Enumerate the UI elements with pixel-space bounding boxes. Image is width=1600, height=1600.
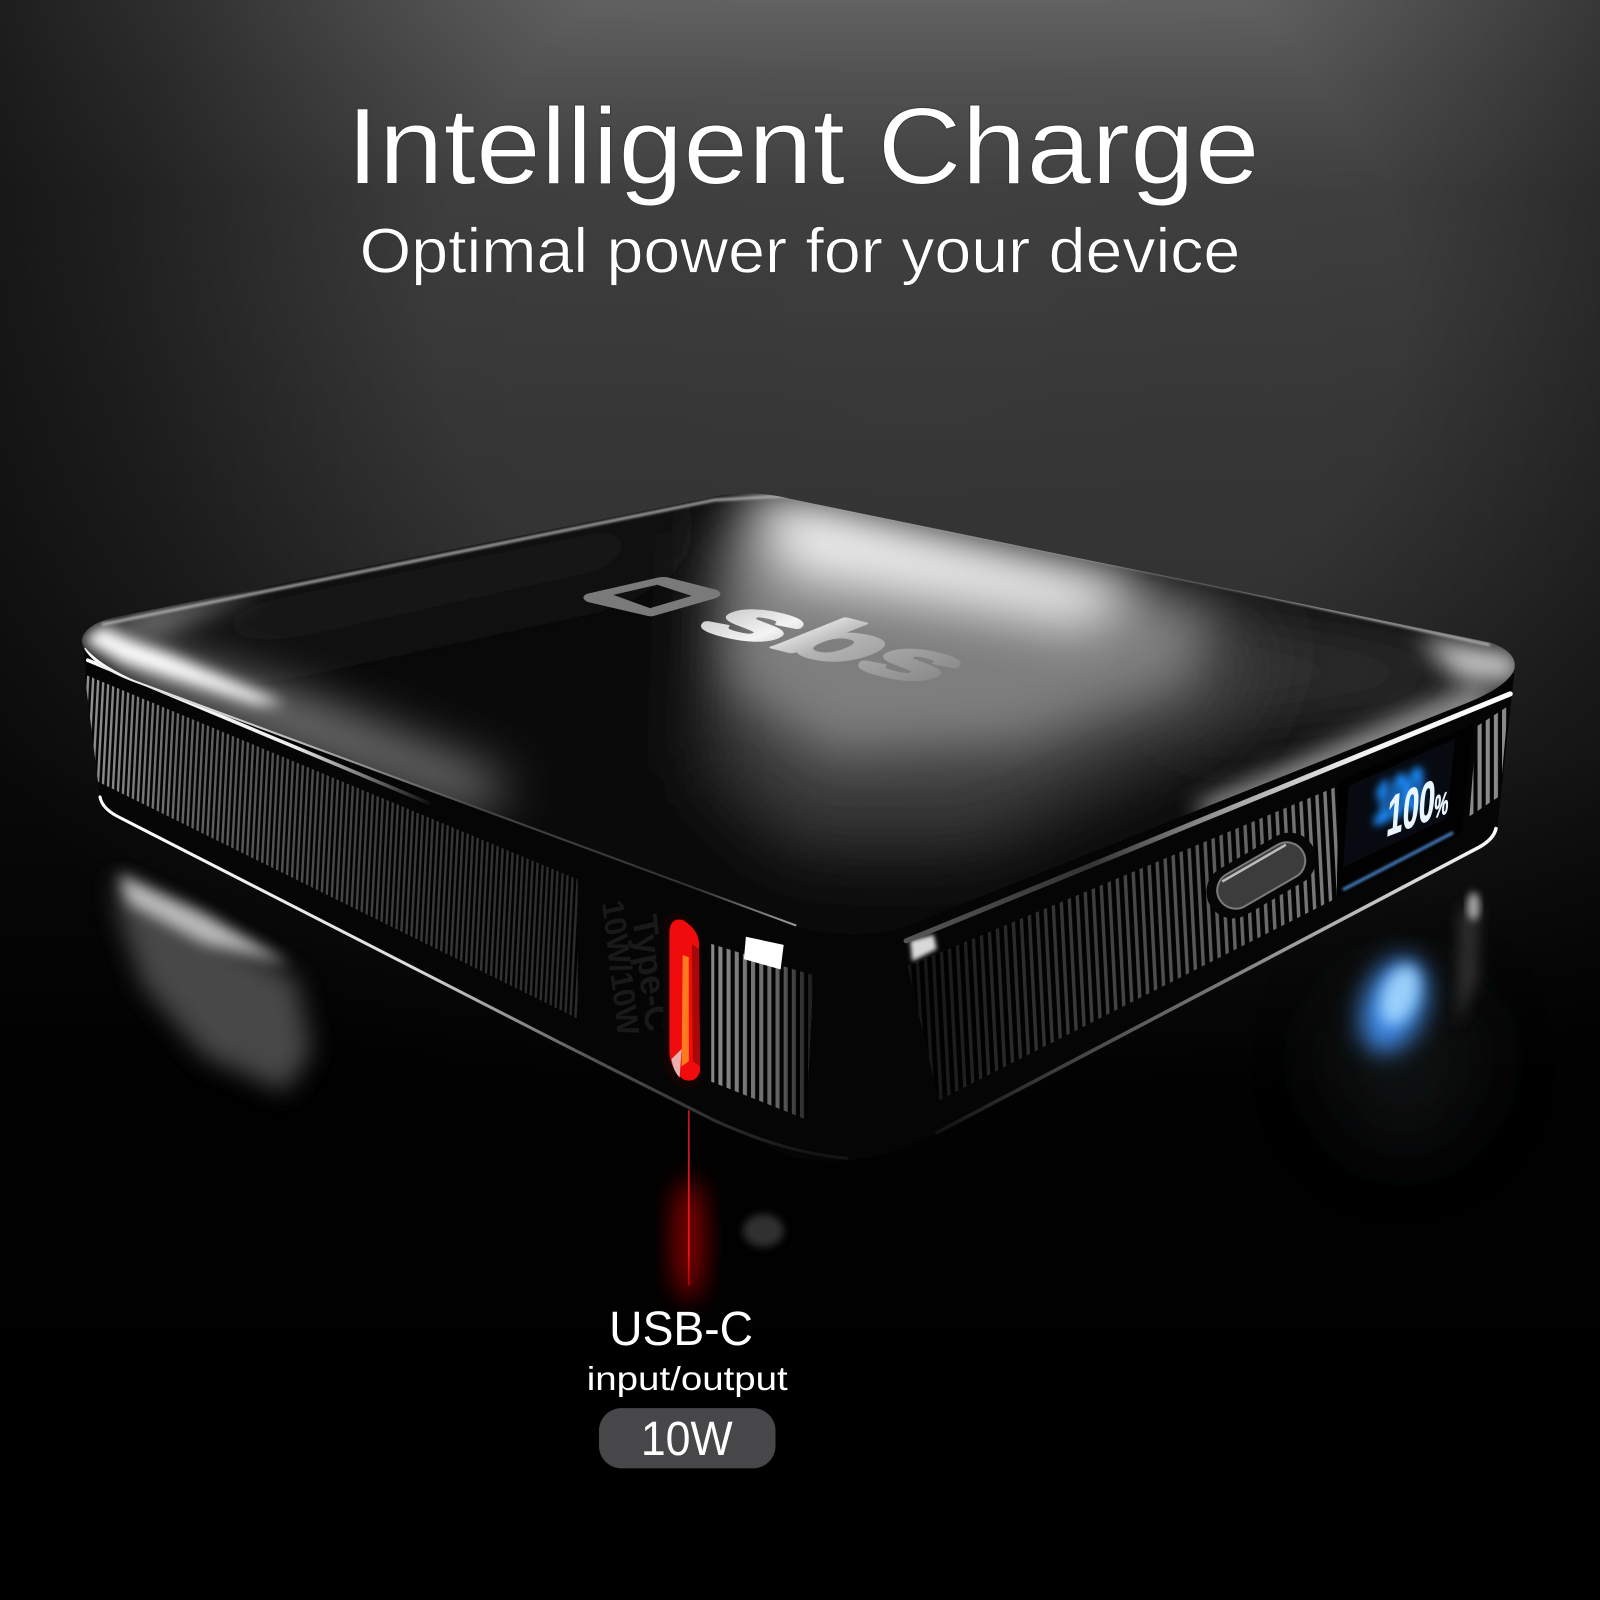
surface sheen: right shoulder (1173, 602, 1490, 735)
power bank device (61, 480, 1541, 1161)
surface sheen: back left (234, 532, 622, 640)
title: Intelligent Charge (346, 86, 1260, 207)
embossed port lettering: 10W/10W (595, 897, 646, 1040)
right ribbed side panel (908, 706, 1508, 1100)
reflection: small grey spot (743, 1214, 784, 1247)
USB-C port (663, 913, 702, 1089)
surface sheen: right rim (1194, 684, 1500, 827)
subtitle: Optimal power for your device (360, 216, 1240, 286)
surface sheen: bright spot (740, 495, 1153, 628)
surface sheen: wide falloff (704, 531, 1276, 847)
front ribbed panel (711, 937, 813, 1119)
floor reflections (115, 873, 1485, 1247)
bottom rim highlights (100, 797, 1496, 1158)
display reading: 100% (1385, 762, 1452, 849)
logo: sbs (583, 577, 1011, 693)
reflection: blue display glow (1321, 892, 1485, 1153)
device body (84, 653, 1514, 1161)
display glow: 100 (1373, 755, 1425, 837)
reflection: left side glow (115, 873, 311, 1092)
callout label: USB-C: USB-C (609, 1303, 753, 1356)
embossed port lettering: Type-C (625, 912, 677, 1035)
badge: 10W (599, 1408, 776, 1468)
callout: USB-C leader line (672, 1110, 705, 1301)
logo wordmark: sbs (668, 591, 1011, 693)
top surface (82, 494, 1515, 926)
battery display (1337, 724, 1473, 898)
surface sheen: right corner (1418, 638, 1520, 684)
side rim lines (88, 660, 1510, 941)
logo mark: square (583, 577, 720, 616)
power button (1197, 823, 1326, 928)
left ribbed side panel (85, 674, 578, 1018)
badge: 10W: 10W (641, 1413, 733, 1466)
surface sheen: broad grey band (727, 526, 1214, 755)
surface sheen: left corner (82, 631, 510, 806)
embossed port lettering (595, 897, 677, 1040)
callout label: input/output: input/output (587, 1361, 788, 1398)
